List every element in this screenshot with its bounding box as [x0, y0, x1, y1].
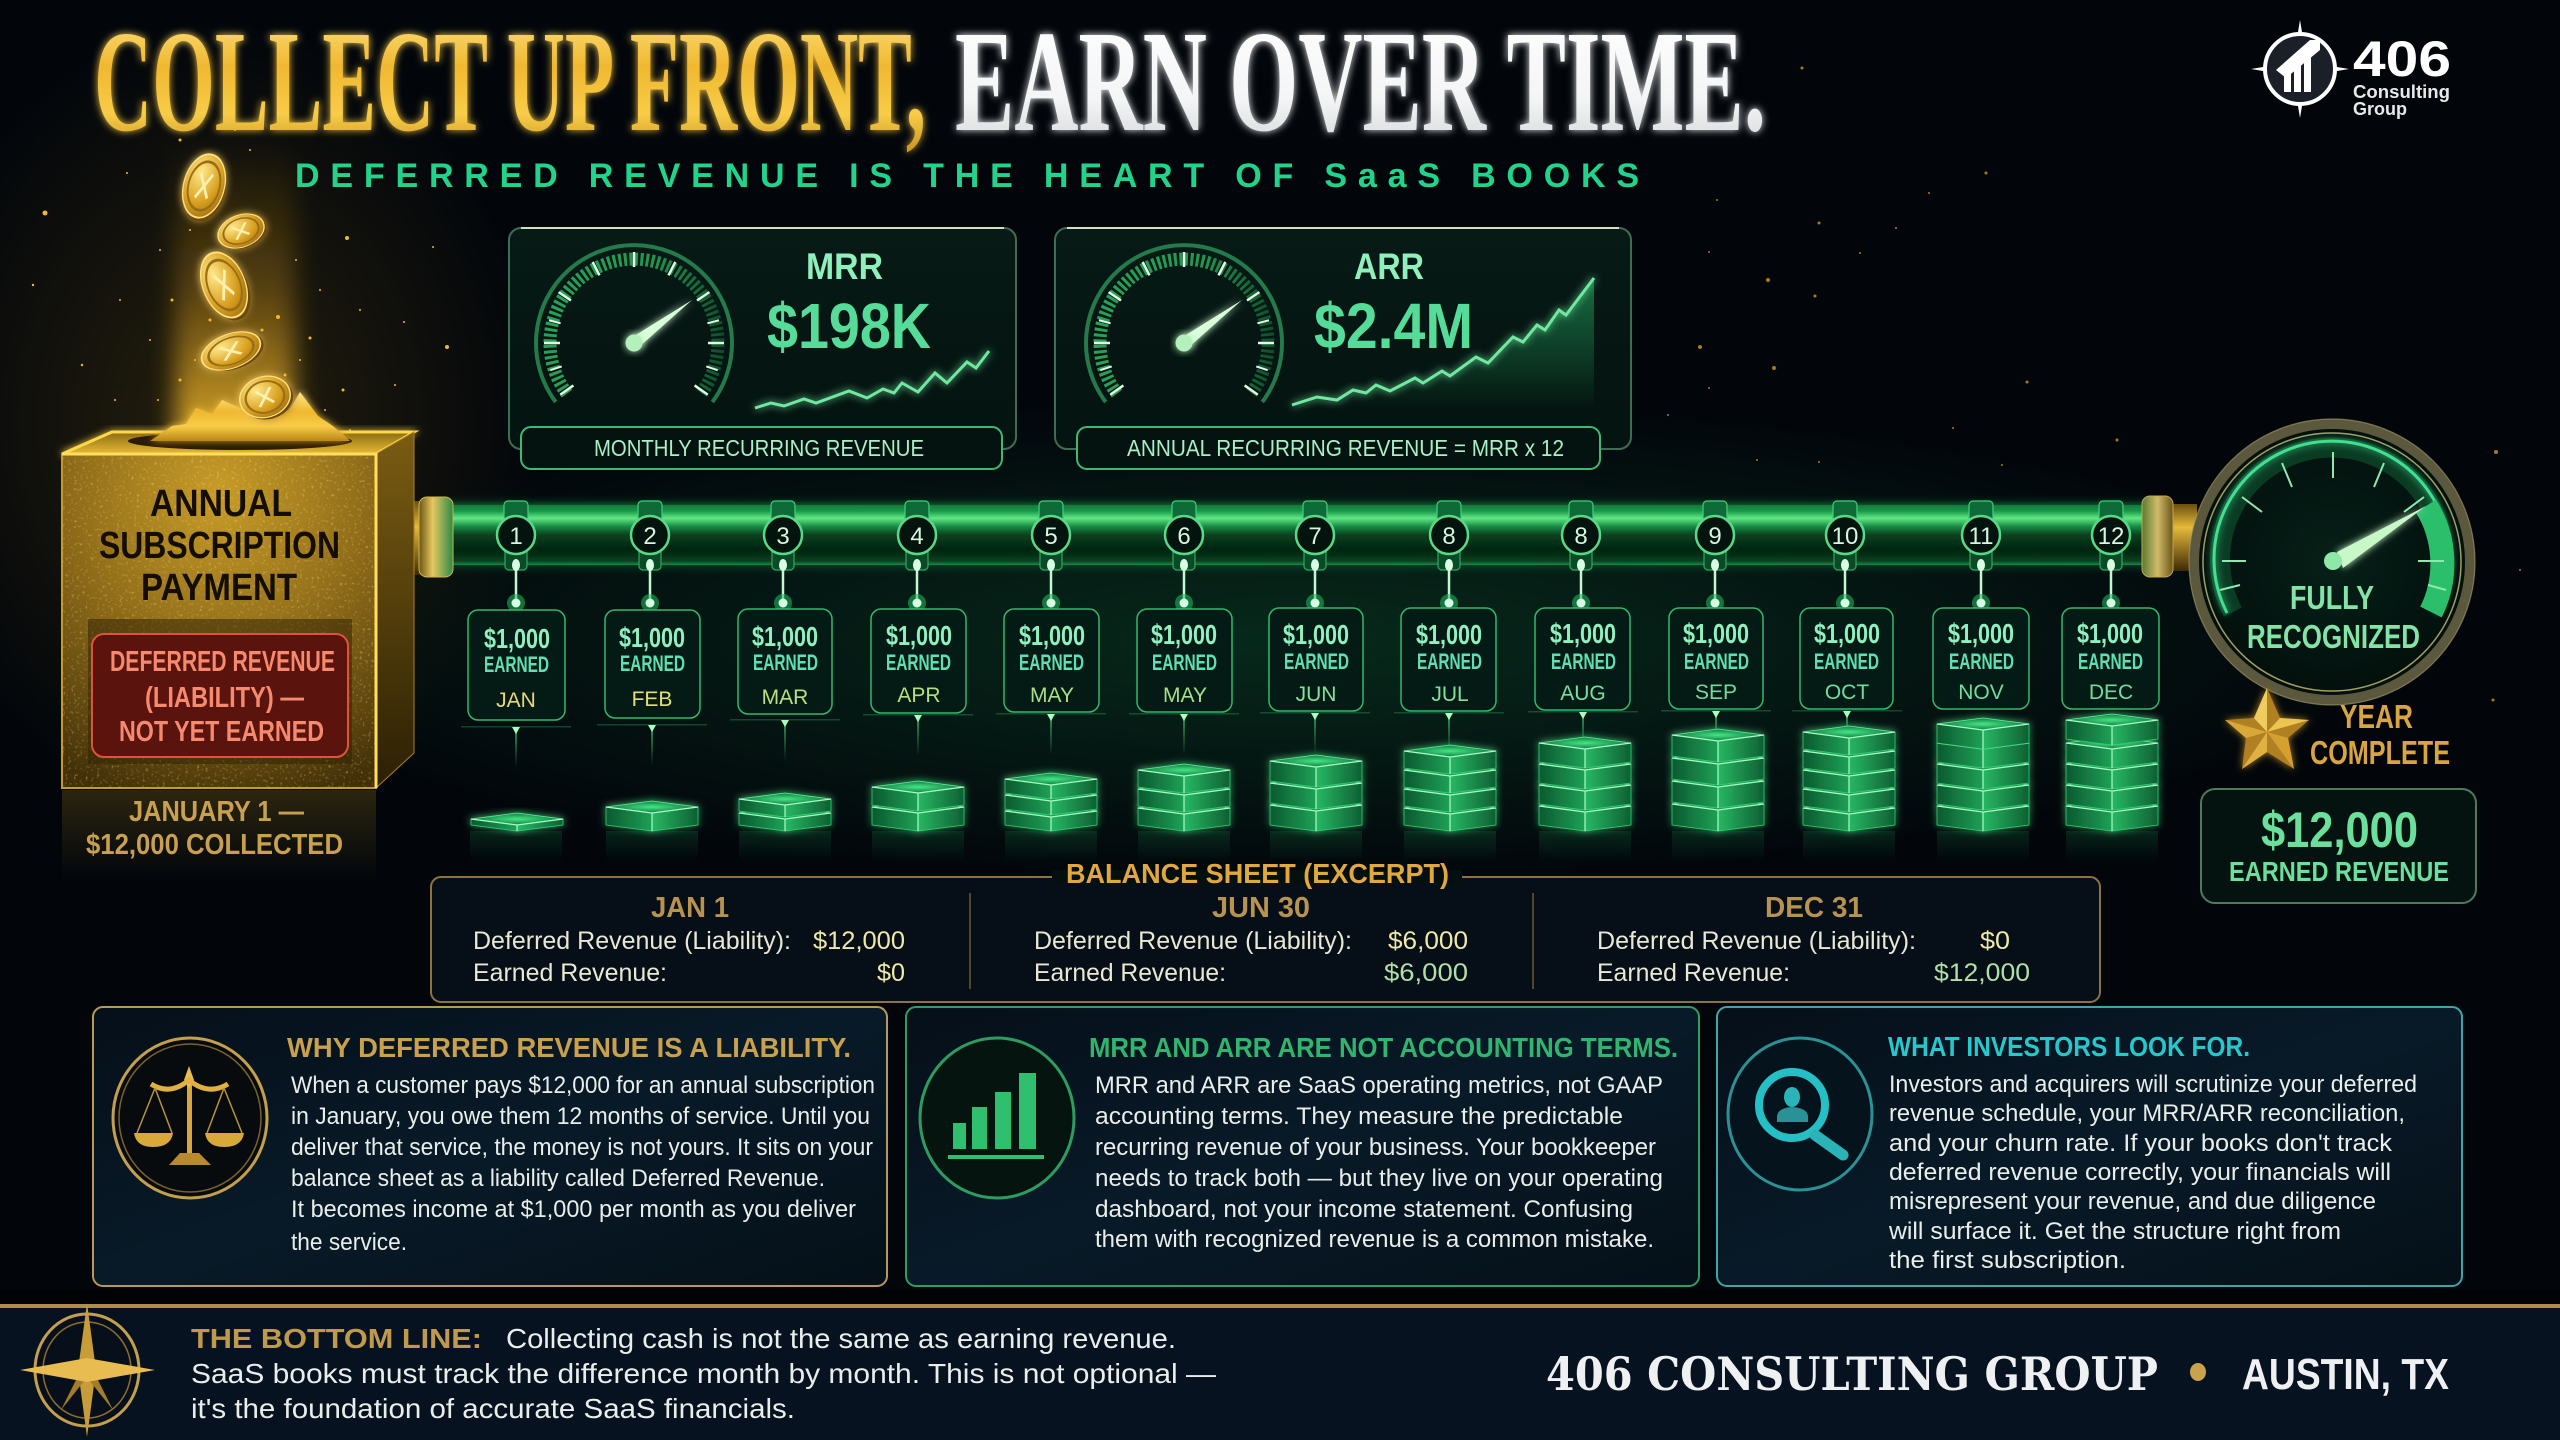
column: Jan 1 — [473, 892, 905, 987]
balance sheet excerpt — [431, 858, 2100, 1002]
month 12: November: NOV — [1958, 681, 2004, 704]
column: Jun 30: $6,000 — [1384, 959, 1468, 987]
panel: ARR — [1055, 228, 1631, 469]
month 5: May: 5 — [1044, 523, 1058, 550]
month 10: September: $1,000 — [1683, 618, 1749, 649]
gauge: ARR — [1086, 245, 1282, 402]
month 12: November: EARNED — [1949, 649, 2014, 674]
month 9: August: $1,000 — [1550, 618, 1616, 649]
icon: footer compass — [20, 1303, 155, 1437]
panel text: recurring revenue of your business. Your bookkeeper — [1095, 1134, 1656, 1161]
month 2: February — [597, 501, 707, 861]
month 9: August — [1528, 501, 1638, 861]
month 10: September — [1661, 501, 1771, 861]
logo: 406 Consulting Group: 406 — [2353, 31, 2451, 87]
gauge: fully recognized — [2189, 419, 2475, 705]
column: Jan 1: Earned Revenue: — [473, 959, 667, 987]
year complete: COMPLETE — [2310, 734, 2450, 771]
footer band — [0, 1304, 2560, 1440]
ambient gold sparks right side — [1667, 66, 2521, 702]
panel: MRR and ARR are not accounting terms — [906, 1007, 1699, 1286]
month 7: June — [1260, 501, 1370, 861]
column: Jun 30: JUN 30 — [1212, 892, 1310, 924]
month 13: December: EARNED — [2078, 649, 2143, 674]
month 2: February: FEB — [632, 688, 672, 711]
panel: what investors look for — [1717, 1007, 2462, 1286]
month 8: July — [1394, 501, 1504, 861]
liability label — [92, 634, 348, 757]
year complete: YEAR — [2340, 698, 2413, 735]
column: Dec 31 — [1597, 892, 2030, 987]
month 3: March: $1,000 — [752, 621, 818, 652]
panel: ARR: ARR — [1354, 246, 1424, 287]
month 6: May (second) — [1129, 501, 1239, 861]
title: EARN OVER TIME. — [955, 2, 1766, 162]
gold box: annual subscription payment — [62, 392, 414, 880]
month 8: July: JUL — [1431, 683, 1469, 706]
panel text: needs to track both — but they live on your operating — [1095, 1165, 1663, 1192]
panel text: balance sheet as a liability called Deferred Revenue. — [291, 1165, 825, 1192]
falling gold coins — [175, 150, 298, 426]
month 13: December: DEC — [2089, 681, 2133, 704]
column: Jun 30: Deferred Revenue (Liability): — [1034, 927, 1352, 955]
month 8: July: 8 — [1442, 523, 1456, 550]
month 11: October: 10 — [1832, 523, 1858, 550]
month 1: January: 1 — [509, 523, 523, 550]
month 4: April: 4 — [910, 523, 924, 550]
bottom line text — [191, 1323, 1216, 1424]
panel text — [291, 1072, 875, 1256]
gold box: annual subscription payment: PAYMENT — [141, 567, 297, 609]
logo: 406 Consulting Group: Consulting — [2353, 82, 2450, 102]
month 1: January: EARNED — [484, 652, 549, 677]
icon: bar chart — [920, 1038, 1074, 1198]
column: Dec 31: DEC 31 — [1765, 892, 1863, 924]
panel text: deliver that service, the money is not yours. It sits on your — [291, 1134, 873, 1161]
panel text — [1095, 1072, 1663, 1253]
bottom line text: THE BOTTOM LINE: — [191, 1323, 482, 1354]
month 7: June: JUN — [1296, 683, 1336, 706]
month 13: December — [2062, 501, 2159, 861]
month 2: February: 2 — [643, 523, 657, 550]
panel: MRR — [509, 228, 1016, 469]
panel: MRR: $198K — [767, 290, 931, 362]
icon: scales of justice — [113, 1038, 267, 1198]
column: Dec 31: Deferred Revenue (Liability): — [1597, 927, 1916, 955]
panel text: dashboard, not your income statement. Confusing — [1095, 1196, 1633, 1223]
month 4: April: EARNED — [886, 650, 951, 675]
column: Dec 31: Earned Revenue: — [1597, 959, 1790, 987]
panel: why deferred revenue is a liability: WHY DEFERRED REVENUE IS A LIABILITY. — [287, 1032, 851, 1063]
gold box: annual subscription payment: SUBSCRIPTION — [99, 525, 340, 567]
month 13: December: 12 — [2098, 523, 2124, 550]
month 3: March: 3 — [776, 523, 790, 550]
panel text: Investors and acquirers will scrutinize your deferred — [1889, 1071, 2417, 1098]
month 11: October: EARNED — [1814, 649, 1879, 674]
month 6: May (second): EARNED — [1152, 650, 1217, 675]
column: Dec 31: $0 — [1980, 927, 2010, 955]
month 5: May — [996, 501, 1106, 861]
logo: 406 Consulting Group: Group — [2353, 99, 2407, 119]
month 2: February: EARNED — [620, 651, 685, 676]
month 1: January — [461, 501, 571, 861]
earned revenue total: $12,000 — [2261, 802, 2418, 858]
panel: MRR and ARR are not accounting terms: MRR AND ARR ARE NOT ACCOUNTING TERMS. — [1089, 1032, 1678, 1063]
panel text: and your churn rate. If your books don't track — [1889, 1130, 2393, 1157]
column: Dec 31: $12,000 — [1934, 959, 2030, 987]
month 9: August: EARNED — [1551, 649, 1616, 674]
panel text: accounting terms. They measure the predictable — [1095, 1103, 1623, 1130]
month 13: December: $1,000 — [2077, 618, 2143, 649]
month 10: September: SEP — [1695, 681, 1737, 704]
title: COLLECT UP FRONT, — [94, 2, 926, 162]
liability label: DEFERRED REVENUE — [110, 646, 335, 678]
month 3: March: EARNED — [753, 650, 818, 675]
year complete — [2310, 698, 2450, 771]
icon: gold star — [2225, 688, 2309, 769]
column: Jan 1: Deferred Revenue (Liability): — [473, 927, 791, 955]
panel: why deferred revenue is a liability — [93, 1007, 887, 1286]
gold pile — [150, 392, 350, 441]
column: Jan 1: $12,000 — [813, 927, 905, 955]
month 7: June: $1,000 — [1283, 619, 1349, 650]
column: Jun 30: $6,000 — [1388, 927, 1468, 955]
footer brand: AUSTIN, TX — [2242, 1350, 2449, 1399]
month 12: November: $1,000 — [1948, 618, 2014, 649]
month 3: March: MAR — [762, 686, 808, 709]
month 1: January: JAN — [496, 689, 536, 712]
panel: what investors look for: WHAT INVESTORS LOOK FOR. — [1888, 1031, 2250, 1062]
month 3: March — [730, 501, 840, 861]
panel: MRR: MRR — [806, 246, 883, 287]
footer brand: 406 CONSULTING GROUP — [1546, 1347, 2158, 1401]
month 4: April: APR — [897, 684, 941, 707]
month 9: August: 8 — [1574, 523, 1588, 550]
panel text: the service. — [291, 1229, 407, 1256]
gold box: annual subscription payment: ANNUAL — [150, 483, 292, 525]
panel text: will surface it. Get the structure right from — [1888, 1218, 2341, 1245]
icon: magnifier with person — [1728, 1038, 1872, 1190]
column: Jun 30: Earned Revenue: — [1034, 959, 1226, 987]
panel text: MRR and ARR are SaaS operating metrics, not GAAP — [1095, 1072, 1663, 1099]
month 12: November — [1933, 501, 2029, 861]
month 7: June: EARNED — [1284, 649, 1349, 674]
panel: MRR: MONTHLY RECURRING REVENUE — [594, 435, 924, 461]
collected caption: $12,000 COLLECTED — [86, 829, 343, 861]
pipeline — [390, 496, 2197, 577]
month 8: July: $1,000 — [1416, 619, 1482, 650]
month 6: May (second): 6 — [1177, 523, 1191, 550]
month 4: April: $1,000 — [886, 620, 952, 651]
gold sparks around the falling coins — [32, 129, 449, 440]
panel text: them with recognized revenue is a common mistake. — [1095, 1226, 1654, 1253]
month 7: June: 7 — [1308, 523, 1322, 550]
column: Jan 1: $0 — [877, 959, 905, 987]
month 10: September: 9 — [1708, 523, 1722, 550]
month 9: August: AUG — [1560, 682, 1606, 705]
gauge: MRR — [536, 245, 732, 402]
month 8: July: EARNED — [1417, 649, 1482, 674]
collected caption: JANUARY 1 — — [129, 796, 304, 828]
bottom line text: it's the foundation of accurate SaaS financials. — [191, 1393, 795, 1424]
earned revenue total — [2201, 789, 2476, 903]
panel: ARR: $2.4M — [1314, 290, 1473, 362]
month 11: October — [1792, 501, 1902, 861]
panel: ARR: ANNUAL RECURRING REVENUE = MRR x 12 — [1127, 435, 1564, 461]
column: Jan 1: JAN 1 — [651, 892, 729, 924]
month 4: April — [863, 501, 973, 861]
subtitle: DEFERRED REVENUE IS THE HEART OF SaaS BOOKS — [295, 157, 1639, 195]
month 11: October: $1,000 — [1814, 618, 1880, 649]
month 2: February: $1,000 — [619, 622, 685, 653]
collected caption — [86, 796, 343, 861]
panel text: the first subscription. — [1889, 1247, 2126, 1274]
panel text: deferred revenue correctly, your financials will — [1889, 1159, 2391, 1186]
month 12: November: 11 — [1969, 523, 1993, 550]
panel text: in January, you owe them 12 months of service. Until you — [291, 1103, 870, 1130]
panel text: It becomes income at $1,000 per month as you deliver — [291, 1196, 856, 1223]
logo: 406 Consulting Group — [2251, 20, 2451, 119]
liability label: (LIABILITY) — — [145, 682, 304, 714]
month 6: May (second): $1,000 — [1151, 619, 1217, 650]
bottom line text: SaaS books must track the difference month by month. This is not optional — — [191, 1358, 1216, 1389]
month 11: October: OCT — [1825, 681, 1869, 704]
panel text: revenue schedule, your MRR/ARR reconciliation, — [1889, 1100, 2405, 1127]
column: Jun 30 — [1034, 892, 1468, 987]
liability label: NOT YET EARNED — [119, 716, 324, 748]
gauge: fully recognized: FULLY — [2290, 579, 2374, 616]
balance sheet excerpt: BALANCE SHEET (EXCERPT) — [1066, 858, 1449, 889]
bottom line text: Collecting cash is not the same as earning revenue. — [506, 1323, 1176, 1354]
month 5: May: $1,000 — [1019, 620, 1085, 651]
panel text — [1888, 1071, 2417, 1274]
month 5: May: MAY — [1030, 684, 1074, 707]
panel text: When a customer pays $12,000 for an annual subscription — [291, 1072, 875, 1099]
month 5: May: EARNED — [1019, 650, 1084, 675]
panel text: misrepresent your revenue, and due diligence — [1889, 1188, 2376, 1215]
gauge: fully recognized: RECOGNIZED — [2247, 618, 2420, 655]
earned revenue total: EARNED REVENUE — [2229, 856, 2449, 887]
month 6: May (second): MAY — [1163, 684, 1207, 707]
month 1: January: $1,000 — [484, 623, 550, 654]
month 10: September: EARNED — [1684, 649, 1749, 674]
